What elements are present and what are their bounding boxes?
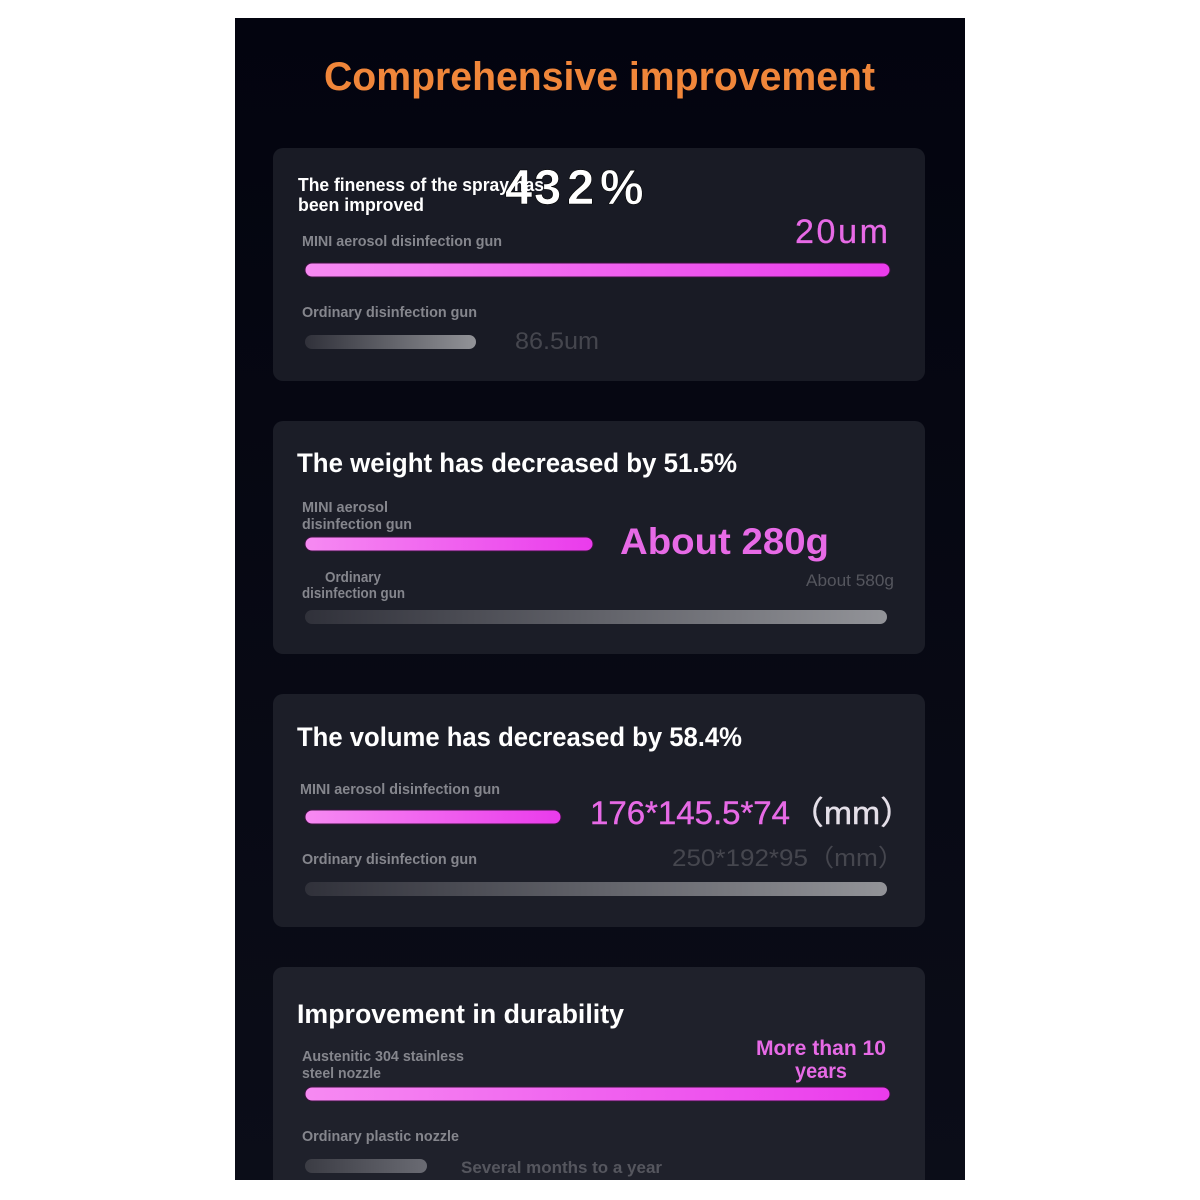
value: more than 10 years: More than 10: [756, 1037, 886, 1060]
heading: spray fineness: been improved: [298, 195, 424, 215]
label: stainless nozzle: steel nozzle: [302, 1065, 381, 1082]
label: MINI gun: MINI aerosol disinfection gun: [300, 781, 500, 798]
heading: weight: The weight has decreased by 51.5%: [297, 448, 737, 478]
label: ordinary gun: disinfection gun: [302, 585, 405, 602]
heading: spray fineness: The fineness of the spray has: [298, 175, 544, 195]
page background: [235, 18, 965, 1180]
value: several months to a year: Several months to a year: [461, 1158, 662, 1177]
value: about 280g: About 280g: [620, 521, 829, 562]
heading: volume: The volume has decreased by 58.4%: [297, 722, 742, 752]
label: MINI gun: MINI aerosol: [302, 499, 388, 516]
bar: plastic nozzle: [305, 1159, 427, 1173]
panel: spray fineness: [273, 148, 925, 381]
value: ordinary dimensions: 250*192*95: [672, 845, 808, 872]
label: stainless nozzle: Austenitic 304 stainless: [302, 1048, 464, 1065]
value: 86.5um: 86.5um: [515, 328, 599, 355]
label: ordinary gun: [302, 569, 405, 602]
value: ordinary dimensions: [672, 845, 904, 872]
label: stainless nozzle: [302, 1048, 464, 1082]
title: Comprehensive improvement: [324, 55, 875, 99]
panel: weight: [273, 421, 925, 654]
big figure: 432%: 432%: [505, 161, 644, 215]
label: ordinary gun: Ordinary disinfection gun: [302, 304, 477, 321]
bar: ordinary gun: [305, 335, 476, 349]
value: about 580g: About 580g: [806, 571, 894, 590]
label: MINI gun: disinfection gun: [302, 516, 412, 533]
label: MINI gun: [302, 499, 412, 533]
label: ordinary gun: Ordinary: [325, 569, 382, 586]
value: more than 10 years: years: [795, 1060, 847, 1083]
value: more than 10 years: [756, 1037, 886, 1083]
label: plastic nozzle: Ordinary plastic nozzle: [302, 1128, 459, 1145]
bar: MINI gun: [305, 263, 890, 277]
heading: durability: Improvement in durability: [297, 999, 624, 1029]
value: MINI dimensions: [590, 795, 914, 831]
label: MINI gun: MINI aerosol disinfection gun: [302, 233, 502, 250]
value: MINI dimensions: 176*145.5*74: [590, 795, 790, 831]
bar: ordinary gun: [305, 882, 887, 896]
value: ordinary dimensions: （mm）: [808, 845, 904, 872]
panel: durability: [273, 967, 925, 1180]
bar: stainless nozzle: [305, 1087, 890, 1101]
bar: ordinary gun: [305, 610, 887, 624]
value: 20um: 20um: [795, 213, 888, 251]
value: MINI dimensions: （mm）: [790, 795, 914, 831]
bar: MINI gun: [305, 810, 561, 824]
label: ordinary gun: Ordinary disinfection gun: [302, 851, 477, 868]
heading: spray fineness: [298, 175, 544, 215]
bar: MINI gun: [305, 537, 593, 551]
panel: volume: [273, 694, 925, 927]
